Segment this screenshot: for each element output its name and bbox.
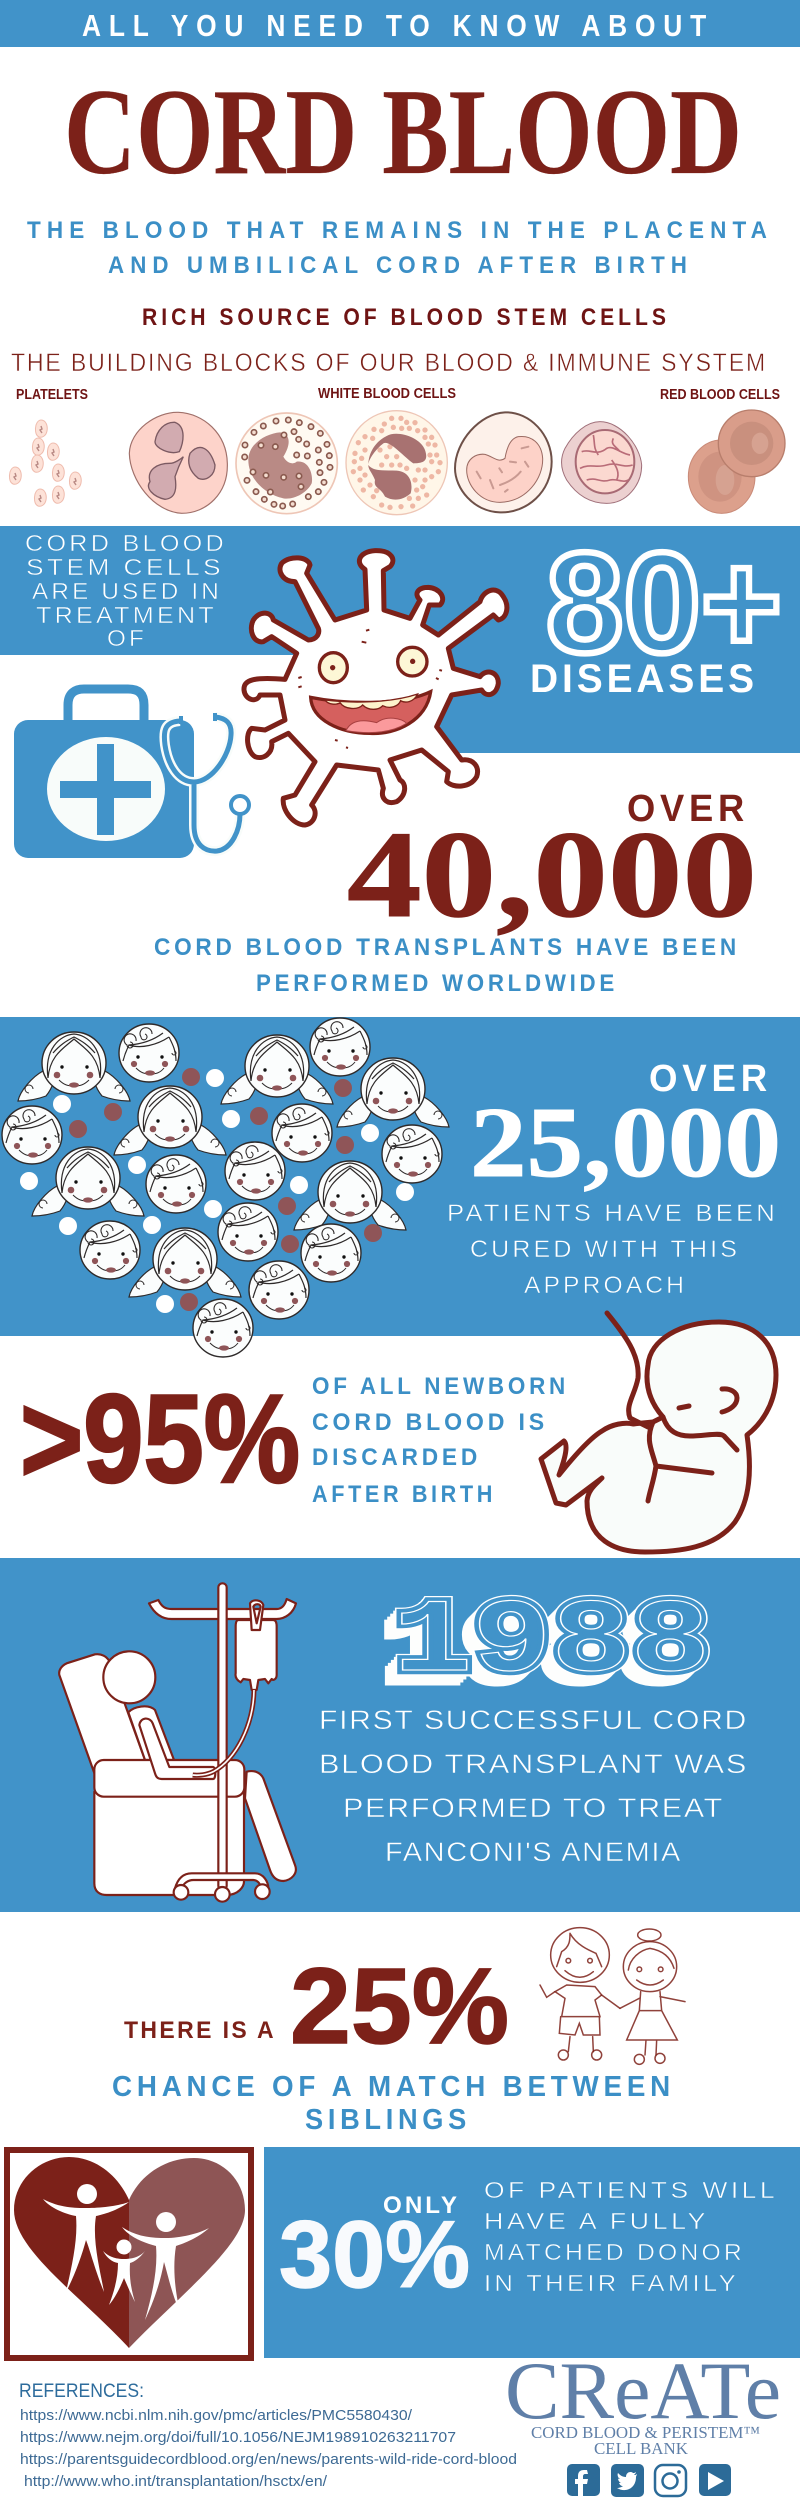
subtitle bbox=[27, 217, 773, 279]
label: red blood cells: RED BLOOD CELLS bbox=[660, 387, 780, 403]
text: over: OVER bbox=[627, 788, 749, 830]
number: 1988: 1988 bbox=[384, 1592, 701, 1710]
text: of patients will have a fully matched donor: HAVE A FULLY bbox=[484, 2208, 709, 2234]
panel: header bbox=[0, 0, 800, 47]
panel: patients cured bbox=[0, 1017, 800, 1336]
stat: 95 percent discarded bbox=[20, 1370, 569, 1509]
text: first successful transplant: BLOOD TRANSPLANT WAS bbox=[319, 1749, 748, 1779]
text: of all newborn cord blood is discarded: OF ALL NEWBORN bbox=[312, 1373, 569, 1400]
text: of all newborn cord blood is discarded bbox=[312, 1373, 569, 1508]
number: 25,000: 25,000 bbox=[470, 1086, 781, 1198]
text: over: OVER bbox=[649, 1058, 772, 1100]
number: 40,000: 40,000 bbox=[347, 806, 757, 943]
number: 1988 bbox=[381, 1584, 710, 1713]
text: patients cured: APPROACH bbox=[524, 1272, 687, 1299]
number: 30%: 30% bbox=[279, 2202, 470, 2308]
text: chance of a match between siblings: SIBLINGS bbox=[305, 2104, 471, 2136]
text: there is a: THERE IS A bbox=[124, 2017, 276, 2044]
label: diseases: DISEASES bbox=[530, 657, 758, 701]
heading: all you need to know about: ALL YOU NEED TO KNOW ABOUT bbox=[82, 9, 714, 43]
icon: twitter bbox=[611, 2464, 644, 2497]
text: of patients will have a fully matched donor: MATCHED DONOR bbox=[484, 2239, 745, 2265]
text: cord blood stem cells used in treatment of: CORD BLOOD bbox=[25, 530, 227, 556]
stat: over 40,000 transplants bbox=[154, 788, 757, 997]
text: of all newborn cord blood is discarded: CORD BLOOD IS bbox=[312, 1409, 548, 1436]
number: 1988: 1988 bbox=[387, 1589, 704, 1707]
references: http://www.who.int/transplantation/hsctx/en/ bbox=[24, 2473, 328, 2490]
number: 1988: 1988 bbox=[390, 1586, 707, 1704]
icon: boy and girl bbox=[540, 1928, 685, 2064]
references: REFERENCES: bbox=[19, 2381, 144, 2402]
icon: heart of faces bbox=[2, 1018, 449, 1357]
icon: family heart bbox=[7, 2150, 251, 2358]
text: cord blood stem cells used in treatment of: STEM CELLS bbox=[26, 554, 224, 580]
text: first successful transplant: FIRST SUCCESSFUL CORD bbox=[319, 1705, 748, 1735]
text: patients cured: CURED WITH THIS bbox=[470, 1236, 740, 1263]
number: 1988: 1988 bbox=[393, 1584, 710, 1702]
text: patients cured bbox=[447, 1200, 778, 1299]
icon: instagram bbox=[655, 2465, 686, 2496]
icon: baby bbox=[541, 1313, 776, 1552]
references: https://www.nejm.org/doi/full/10.1056/NEJM198910263211707 bbox=[20, 2429, 456, 2446]
icon: medical bag bbox=[14, 689, 194, 858]
text: transplants performed: PERFORMED WORLDWIDE bbox=[256, 970, 618, 997]
number: >95%: >95% bbox=[20, 1370, 300, 1509]
text: of all newborn cord blood is discarded: AFTER BIRTH bbox=[312, 1481, 496, 1508]
text: of all newborn cord blood is discarded: DISCARDED bbox=[312, 1444, 481, 1471]
text: only: ONLY bbox=[383, 2192, 460, 2219]
stat: 80+: 80+ bbox=[546, 524, 782, 683]
logo: create cord blood and peristem cell bank: CELL BANK bbox=[594, 2439, 689, 2458]
subtitle: THE BLOOD THAT REMAINS IN THE PLACENTA bbox=[27, 217, 773, 244]
logo: create cord blood and peristem cell bank: CReATe bbox=[505, 2345, 781, 2436]
text: transplants performed: CORD BLOOD TRANSPLANTS HAVE BEEN bbox=[154, 934, 740, 961]
text: chance of a match between siblings: CHANCE OF A MATCH BETWEEN bbox=[112, 2071, 675, 2103]
number: 1988: 1988 bbox=[393, 1584, 710, 1702]
panel: diseases bbox=[0, 524, 800, 753]
label: white blood cells: WHITE BLOOD CELLS bbox=[318, 386, 456, 402]
icon: white blood cells bbox=[129, 411, 447, 515]
icon: stethoscope bbox=[164, 713, 249, 851]
icon: red blood cells bbox=[688, 410, 785, 513]
text: first successful transplant: FANCONI'S ANEMIA bbox=[385, 1837, 682, 1867]
text: first successful transplant: PERFORMED TO TREAT bbox=[343, 1793, 724, 1823]
stat: 25 percent sibling match bbox=[112, 1945, 675, 2136]
text: chance of a match between siblings bbox=[112, 2071, 675, 2136]
text: of patients will have a fully matched donor bbox=[484, 2177, 778, 2296]
text: patients cured: PATIENTS HAVE BEEN bbox=[447, 1200, 778, 1227]
panel: only 30 percent bbox=[264, 2147, 800, 2358]
text: first successful transplant bbox=[319, 1705, 748, 1867]
icon: facebook bbox=[567, 2464, 600, 2496]
text: cord blood stem cells used in treatment of: OF bbox=[107, 625, 147, 651]
text: of patients will have a fully matched donor: IN THEIR FAMILY bbox=[484, 2270, 739, 2296]
text: cord blood stem cells used in treatment of: TREATMENT bbox=[36, 602, 217, 628]
icon: play bbox=[699, 2464, 731, 2496]
references: https://parentsguidecordblood.org/en/news/parents-wild-ride-cord-blood bbox=[20, 2451, 517, 2468]
heading: rich source: RICH SOURCE OF BLOOD STEM CELLS bbox=[142, 304, 670, 331]
number: 1988: 1988 bbox=[393, 1584, 710, 1702]
icon: platelets bbox=[9, 420, 81, 506]
text: cord blood stem cells used in treatment of: ARE USED IN bbox=[32, 578, 222, 604]
panel: 1988 first transplant bbox=[0, 1558, 800, 1912]
icon: cell four bbox=[455, 412, 552, 512]
number: 25%: 25% bbox=[290, 1945, 509, 2066]
label: platelets: PLATELETS bbox=[16, 387, 88, 403]
text: of patients will have a fully matched donor: OF PATIENTS WILL bbox=[484, 2177, 778, 2203]
text: cord blood stem cells used in treatment of bbox=[25, 530, 227, 651]
number: 1988: 1988 bbox=[381, 1595, 698, 1713]
subtitle: AND UMBILICAL CORD AFTER BIRTH bbox=[108, 252, 693, 279]
icon: cell one bbox=[129, 412, 227, 513]
icon: patient in chair with iv bbox=[59, 1583, 296, 1902]
icon: cell three bbox=[346, 411, 447, 515]
icon: virus bbox=[244, 551, 507, 825]
references bbox=[19, 2381, 517, 2490]
icon: cell two bbox=[236, 413, 337, 514]
text: transplants performed bbox=[154, 934, 740, 997]
icon: cell five bbox=[561, 422, 642, 503]
references: https://www.ncbi.nlm.nih.gov/pmc/articles/PMC5580430/ bbox=[20, 2407, 413, 2424]
logo: create cord blood and peristem cell bank: CORD BLOOD & PERISTEM™ bbox=[531, 2423, 760, 2442]
